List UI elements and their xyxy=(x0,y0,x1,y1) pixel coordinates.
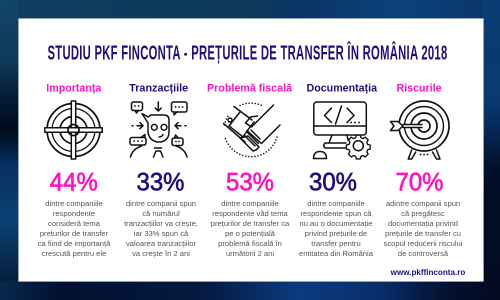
website url: www.pkffinconta.ro xyxy=(390,268,465,277)
description: următorii 2 ani xyxy=(226,249,274,258)
description: va crește în 2 ani xyxy=(132,249,190,258)
description: scopul reducerii riscului xyxy=(384,239,463,248)
statistic: 70%: 70% xyxy=(396,169,444,197)
description: nu au o documentație xyxy=(299,219,373,228)
description: ca fiind de importanță xyxy=(38,239,111,248)
description: transfer pentru xyxy=(311,239,361,248)
description: că numărul xyxy=(142,209,180,218)
description: tranzacțiilor va crește, xyxy=(124,219,198,228)
statistic: 44%: 44% xyxy=(50,169,98,197)
heading: tranzacțiile: Tranzacțiile xyxy=(129,82,188,94)
icon: monitor with code and gear xyxy=(314,102,370,159)
panel: problemă fiscală xyxy=(207,82,292,258)
description: valoarea tranzacțiilor xyxy=(126,239,196,248)
statistic: 33%: 33% xyxy=(136,169,184,197)
panel: documentația xyxy=(299,82,377,258)
description: respondente văd tema xyxy=(212,209,289,218)
description: dintre companii spun xyxy=(126,199,196,208)
statistic: 30%: 30% xyxy=(309,169,357,197)
description: prețurile de transfer cu xyxy=(385,229,461,238)
description: consideră tema xyxy=(48,219,101,228)
description: dintre companiile xyxy=(45,199,103,208)
icon: target with arrow xyxy=(390,101,449,159)
statistic: 53%: 53% xyxy=(226,169,274,197)
description: respondente spun că xyxy=(301,209,372,218)
panel: riscurile xyxy=(384,82,463,258)
description: problemă fiscală în xyxy=(218,239,282,248)
description: adintre companii spun xyxy=(386,199,460,208)
heading: problemă fiscală: Problemă fiscală xyxy=(207,82,292,94)
icon: person with speech bubbles xyxy=(130,102,187,157)
heading: riscurile: Riscurile xyxy=(396,82,442,94)
description: documentația privind xyxy=(388,219,458,228)
description: că pregătesc xyxy=(401,209,445,218)
description: dintre companiile xyxy=(307,199,365,208)
description: prețurilor de transfer xyxy=(40,229,109,238)
description: privind prețurile de xyxy=(305,229,367,238)
description: entitatea din România xyxy=(299,249,374,258)
description: iar 33% spun că xyxy=(134,229,189,238)
description: de controversă xyxy=(398,249,449,258)
icon: handshake xyxy=(224,103,280,157)
heading: documentația: Documentația xyxy=(307,82,377,94)
description: respondente xyxy=(53,209,95,218)
heading: importanța: Importanța xyxy=(46,82,101,94)
description: crescută pentru ele xyxy=(42,249,106,258)
description: pe o potențială xyxy=(225,229,276,238)
description: prețurilor de transfer ca xyxy=(211,219,290,228)
panel: tranzacțiile xyxy=(124,82,198,258)
description: dintre companiile xyxy=(221,199,279,208)
panel: importanța xyxy=(38,82,111,258)
icon: crosshair xyxy=(45,101,102,159)
